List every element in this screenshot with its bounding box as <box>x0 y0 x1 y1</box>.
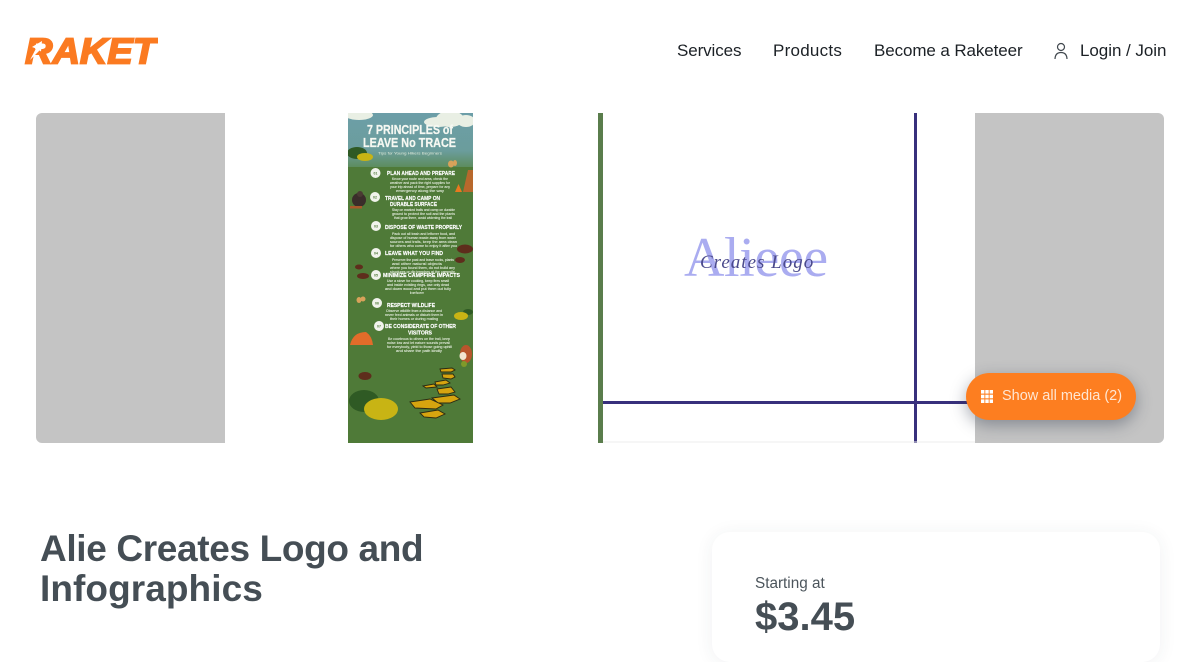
stepping stones <box>410 368 460 418</box>
principle 6: their homes or during mating <box>390 317 438 321</box>
poster sky <box>348 113 473 167</box>
principle 7: and share the path kindly <box>396 349 443 353</box>
media slide: infographic <box>225 113 598 443</box>
logo script: Creates Logo <box>700 252 814 273</box>
principle 1 <box>370 168 456 193</box>
principle 5: Use a stove for cooking, keep fires small <box>387 279 449 283</box>
principle 3: Pack out all trash and leftover food, and <box>392 232 455 236</box>
starting at label: Starting at <box>755 575 825 592</box>
nav link: Services: Services <box>677 41 741 60</box>
button label: Show all media (2) <box>1002 388 1122 404</box>
icon: grid <box>981 390 993 403</box>
principle 4: and other natural objects <box>392 262 443 266</box>
bear <box>350 191 366 208</box>
principle 5: and down wood and put them out fully <box>385 287 451 291</box>
media gallery <box>36 113 1164 443</box>
principle 1: your trip ahead of time, prepare for any <box>390 185 450 189</box>
principle 7: Be courteous to others on the trail, keep <box>388 337 450 341</box>
principle 3: dispose of human waste away from water <box>390 236 457 240</box>
button: show all media <box>966 373 1136 420</box>
principle 7: noise low and let nature sounds prevail <box>387 341 450 345</box>
media slide: logo <box>598 113 975 443</box>
principle 7: 07 <box>377 324 381 328</box>
principle 2: Stay on marked trails and camp on durable <box>392 208 455 212</box>
principle 6 <box>372 298 443 321</box>
principle 7: BE CONSIDERATE OF OTHER <box>385 324 456 330</box>
poster title: LEAVE No TRACE <box>363 136 456 150</box>
fox and fire <box>455 170 473 192</box>
principle 4: LEAVE WHAT YOU FIND <box>385 251 443 257</box>
mound <box>454 309 473 320</box>
tent <box>350 332 373 345</box>
principle 2: TRAVEL AND CAMP ON <box>385 196 440 202</box>
principle 2: DURABLE SURFACE <box>390 202 438 208</box>
principle 5: and inside existing rings, use only dead <box>387 283 449 287</box>
logo wordmark: Alieee <box>684 227 828 289</box>
price: $3.45 <box>755 595 855 639</box>
principle 1: Know your route and area, check the <box>392 177 448 181</box>
principle 3: DISPOSE OF WASTE PROPERLY <box>385 225 463 231</box>
principle 3: 03 <box>374 224 378 228</box>
icon: user <box>1054 42 1068 59</box>
pricing card <box>712 532 1160 662</box>
principle 3: for others who come to enjoy it after you <box>390 244 457 248</box>
principle 4: structures or dig trenches at the campsite <box>390 270 455 274</box>
principle 2: ground to protect the soil and the plants <box>392 212 455 216</box>
principle 6: 06 <box>375 301 379 305</box>
principle 5: before <box>410 291 424 295</box>
butterfly <box>356 296 366 303</box>
principle 4: 04 <box>374 251 378 255</box>
principle 2: that grow there, avoid widening the trail <box>394 216 452 220</box>
page title: Alie Creates Logo and Infographics <box>40 528 423 609</box>
principle 6: never feed animals or disturb them in <box>385 313 443 317</box>
principle 7: for everybody, yield to those going uphill <box>387 345 452 349</box>
principle 1: 01 <box>374 171 377 175</box>
logo frame lines <box>598 113 975 443</box>
principle 4: Preserve the past and leave rocks, plants <box>392 258 454 262</box>
nav link: Login / Join: Login / Join <box>1080 41 1166 60</box>
principle 5: MINIMIZE CAMPFIRE IMPACTS <box>383 273 461 279</box>
large bushes <box>349 390 398 420</box>
principle 5: 05 <box>374 273 378 277</box>
principle 3: sources and trails, keep the area clean <box>390 240 457 244</box>
clouds <box>345 110 475 127</box>
principle 4 <box>371 248 455 274</box>
principle 2: 02 <box>373 195 377 199</box>
principle 7 <box>374 321 456 353</box>
small butterfly <box>448 160 457 168</box>
principle 6: RESPECT WILDLIFE <box>387 303 436 309</box>
poster title: 7 PRINCIPLES of <box>367 123 454 137</box>
principle 1: emergency along the way <box>396 189 445 193</box>
poster title <box>363 123 456 150</box>
top bushes <box>347 147 373 161</box>
principle 2 <box>370 192 455 220</box>
principle 6: Observe wildlife from a distance and <box>386 309 442 313</box>
principle 3 <box>371 221 463 248</box>
principle 1: PLAN AHEAD AND PREPARE <box>387 171 456 177</box>
poster subtitle: Tips for Young Hikers Beginners <box>378 152 442 156</box>
principle 7: VISITORS <box>408 330 433 336</box>
nav link: Products: Products <box>773 41 842 60</box>
principle 1: weather and pack the right supplies for <box>390 181 451 185</box>
principle 5 <box>371 270 461 295</box>
infographic poster <box>348 113 473 443</box>
fox <box>460 345 472 367</box>
rocks <box>355 244 473 380</box>
nav link: Become a Raketeer: Become a Raketeer <box>874 41 1023 60</box>
principle 4: where you found them, do not build any <box>390 266 455 270</box>
